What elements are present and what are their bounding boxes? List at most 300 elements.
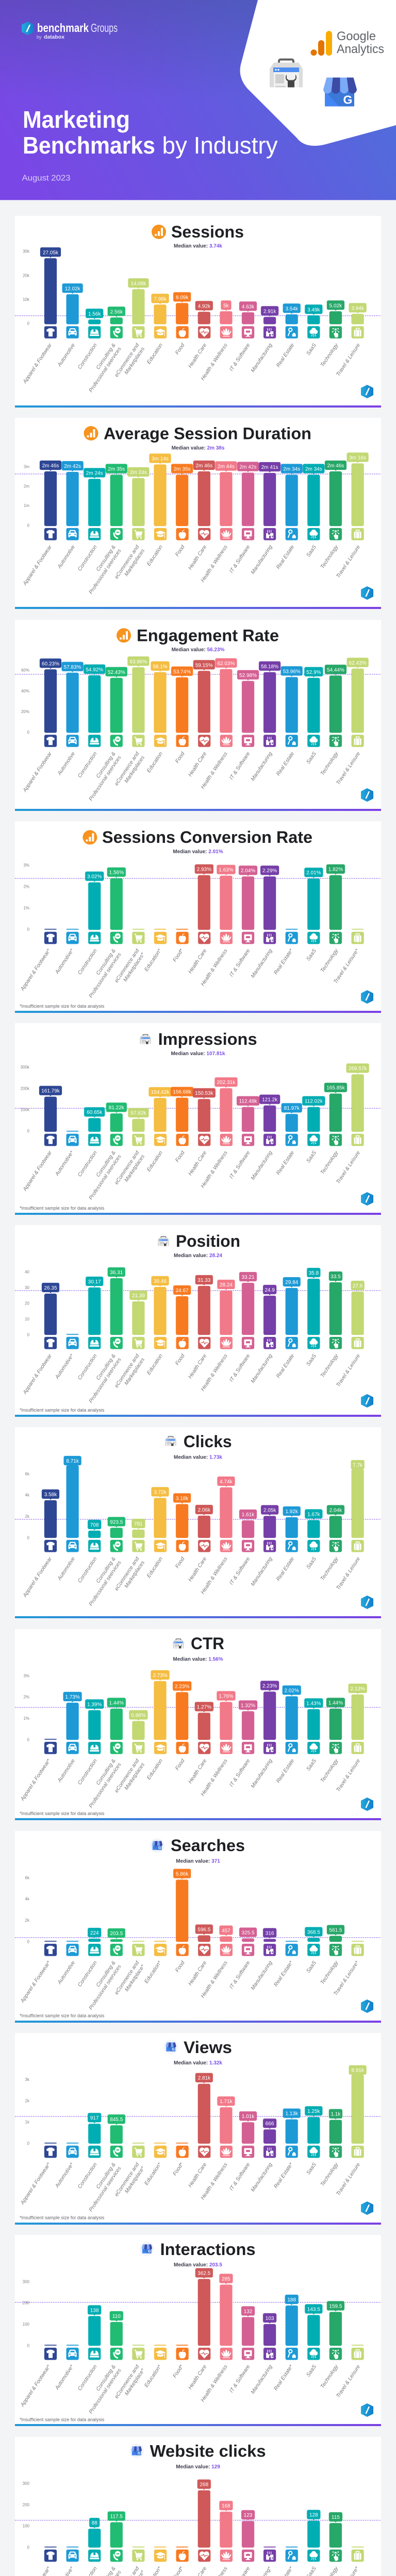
bar: Construction: 3.02% xyxy=(87,874,102,880)
industry labels: Manufacturing xyxy=(250,2162,274,2193)
bar: Food: 24.67 xyxy=(176,1288,189,1294)
bar: Automotive: 1.73% xyxy=(65,1694,80,1700)
y axis: 0 xyxy=(27,927,30,931)
bar: SaaS xyxy=(302,1096,325,1132)
bar: Health Care: 2.06k xyxy=(198,1507,211,1513)
median line xyxy=(15,1519,381,1520)
bar: Manufacturing xyxy=(263,2313,276,2346)
bar: IT & Software xyxy=(239,1928,257,1942)
industry labels: Marketplace* xyxy=(124,1963,146,1993)
heading: CTR xyxy=(191,1634,224,1653)
industry labels: SaaS xyxy=(306,2162,318,2176)
industry labels: Professional seervices xyxy=(88,2368,123,2415)
industry labels: Consulting & xyxy=(95,2364,117,2392)
panel: Clicks xyxy=(15,1427,381,1618)
bar: IT & Software xyxy=(237,1096,259,1132)
bar: Apparel: 2m 46s xyxy=(42,463,59,469)
industry labels: Consulting & xyxy=(95,1556,117,1584)
median value: Median value: 1.56% xyxy=(173,1657,223,1663)
bar: Consulting: 203.5 xyxy=(110,1931,123,1937)
bar: Automotive xyxy=(62,461,84,526)
bar: Travel & Leisure: 62.43% xyxy=(349,660,367,666)
bar: Consulting: 52.43% xyxy=(108,670,125,675)
y axis: 0 xyxy=(27,1129,30,1133)
brand mark xyxy=(361,1193,373,1205)
bar: Health & Wellness: 202.31k xyxy=(217,1080,236,1086)
bar: IT & Software xyxy=(239,301,257,324)
bar: Food: 8.09k xyxy=(176,295,189,300)
median line xyxy=(15,473,381,474)
bar: IT & Software: 1.32% xyxy=(241,1703,255,1708)
heading: Engagement Rate xyxy=(137,626,279,645)
industry labels: Technology xyxy=(320,544,340,570)
industry labels: Consulting & xyxy=(95,948,117,976)
y axis xyxy=(23,249,30,326)
bar: Apparel: 161.79k xyxy=(41,1089,60,1094)
bar: Health Care xyxy=(195,1275,213,1335)
logo: benchmark Groups by databox: databox xyxy=(44,35,64,40)
industry labels: Real Estate xyxy=(275,1150,295,1176)
industry labels: Manufacturing xyxy=(250,751,274,782)
industry labels: eCommerce and xyxy=(114,948,141,984)
bar: Health & Wellness: 4.74k xyxy=(220,1479,233,1485)
industry labels: Technology xyxy=(320,342,340,368)
industry labels: Health & Wellness xyxy=(200,1960,229,1999)
industry labels xyxy=(20,2364,361,2415)
industry labels: Real Estate xyxy=(275,343,295,368)
y axis: 3k xyxy=(25,2077,30,2082)
industry labels: Education* xyxy=(144,2364,163,2388)
y axis: 2k xyxy=(25,1514,30,1519)
bar: Health & Wellness: 28.24 xyxy=(220,1282,233,1288)
icon: Search Console xyxy=(158,1236,169,1246)
bar: SaaS xyxy=(307,2510,320,2548)
industry labels: Consulting & xyxy=(95,1353,117,1381)
bar: IT & Software: 132 xyxy=(244,2309,253,2314)
industry labels: Professional seervices xyxy=(88,952,123,999)
bar: Health & Wellness xyxy=(217,1477,235,1538)
bar: IT & Software xyxy=(239,1700,257,1740)
y axis: 100 xyxy=(23,2524,30,2529)
chart: Sessions xyxy=(22,247,367,394)
brand mark xyxy=(361,2000,373,2012)
bar: Health Care: 59.15% xyxy=(195,663,213,668)
bar: Apparel xyxy=(39,1086,62,1132)
bar: Travel & Leisure: 2.13% xyxy=(350,1686,365,1692)
bar: Health Care xyxy=(193,461,215,526)
median value: Median value: 28.24 xyxy=(174,1253,222,1259)
icon: Search Console xyxy=(173,1639,184,1649)
bar: Real Estate xyxy=(283,1686,301,1740)
bar: Apparel (no data) xyxy=(44,1941,57,1942)
industry labels: Food xyxy=(174,1758,186,1771)
industry labels: Professional seervices xyxy=(88,346,123,394)
bar: Food xyxy=(173,1869,191,1942)
industry labels: Food xyxy=(174,1556,186,1569)
bar: Real Estate (no data) xyxy=(286,2547,298,2548)
bar: Health & Wellness: 5k xyxy=(223,303,229,309)
brand mark xyxy=(361,991,373,1003)
industry labels: eCommerce and xyxy=(114,1960,141,1996)
bar: Apparel (no data) xyxy=(44,2345,57,2346)
footnote: *Insufficient sample size for data analysis xyxy=(20,1811,105,1816)
y axis: 2k xyxy=(25,2098,30,2103)
icon: Google Business xyxy=(140,2242,154,2256)
bar: IT & Software xyxy=(241,2306,255,2346)
bar: Manufacturing (no data) xyxy=(263,2547,276,2548)
bar: Manufacturing xyxy=(263,1285,276,1335)
y axis: 300 xyxy=(23,2279,30,2284)
industry labels: Education xyxy=(146,544,164,567)
bar: Technology xyxy=(325,461,346,526)
y axis: 300k xyxy=(21,1065,30,1070)
median line xyxy=(15,1108,381,1109)
y axis: 2m xyxy=(24,484,29,488)
bar: Health & Wellness xyxy=(214,1077,237,1132)
industry labels: Consulting & xyxy=(95,751,117,779)
bar: Construction xyxy=(85,1699,104,1740)
industry labels: Professional seervices xyxy=(88,1762,123,1809)
industry labels: Consulting & xyxy=(95,2162,117,2190)
bar: Manufacturing: 2.91k xyxy=(263,309,276,314)
bar: Food xyxy=(173,1285,191,1335)
bar: Health Care: 31.33 xyxy=(197,1278,211,1283)
industry labels: Health & Wellness xyxy=(200,2364,229,2403)
heading: Sessions xyxy=(171,223,244,241)
bar: Construction: 224 xyxy=(90,1930,99,1936)
industry labels: Construction xyxy=(77,948,98,976)
bar: eCommerce xyxy=(127,656,149,733)
bar: Travel & Leisure: 3m 16s xyxy=(349,455,366,461)
title xyxy=(23,106,277,159)
chart: Sessions Conversion Rate xyxy=(20,863,364,999)
bar: Health & Wellness: 1.71k xyxy=(220,2099,233,2105)
logo: Google Analytics: Analytics xyxy=(337,42,384,56)
bar: Construction xyxy=(86,1277,103,1335)
industry labels: IT & Software xyxy=(228,2364,252,2394)
bar: Health & Wellness: 168 xyxy=(222,2503,230,2509)
bar: Consulting: 36.31 xyxy=(110,1270,123,1276)
bar: IT & Software: 123 xyxy=(244,2513,253,2518)
industry labels: Marketplaces xyxy=(124,346,146,376)
industry labels: Manufacturing xyxy=(250,2364,274,2395)
industry labels: eCommerce and xyxy=(114,1150,141,1185)
y axis xyxy=(23,2279,30,2348)
bar: Travel & Leisure: 8.91k xyxy=(351,2068,365,2074)
heading: Clicks xyxy=(184,1432,232,1451)
y axis xyxy=(23,2481,30,2550)
bar: Manufacturing xyxy=(259,1095,280,1132)
y axis: 40 xyxy=(25,1269,30,1275)
industry labels: Technology xyxy=(320,1150,340,1176)
bar: Real Estate: 53.96% xyxy=(283,669,301,674)
industry labels: Travel & Leisure xyxy=(335,2364,361,2399)
y axis xyxy=(25,1269,30,1337)
chart: Searches xyxy=(20,1869,364,2011)
y axis: 0 xyxy=(27,1939,30,1944)
bar: Food (no data) xyxy=(176,2345,188,2346)
median value: Median value: 203.5 xyxy=(174,2262,222,2268)
bar: Education xyxy=(152,294,169,324)
industry labels: Automotive* xyxy=(54,1149,75,1177)
industry icons xyxy=(44,735,364,747)
industry labels xyxy=(20,947,360,999)
bar: Education: 154.42k xyxy=(151,1090,170,1095)
industry labels: Marketplaces* xyxy=(123,952,146,983)
y axis: 6k xyxy=(25,1875,30,1880)
heading: Position xyxy=(176,1232,240,1250)
industry labels: Manufacturing xyxy=(250,343,274,374)
industry labels: SaaS xyxy=(306,948,318,962)
bar: Consulting xyxy=(106,464,127,526)
bar: eCommerce (no data) xyxy=(132,2345,144,2346)
bar: Technology: 2.04k xyxy=(329,1507,342,1514)
industry labels: Automotive* xyxy=(54,1353,75,1381)
y axis: 1m xyxy=(24,503,29,508)
title: Marketing xyxy=(23,106,130,133)
median line xyxy=(15,878,381,879)
industry labels: Manufacturing xyxy=(250,1556,274,1587)
industry labels: Apparel & Footwear xyxy=(22,1353,53,1396)
industry labels: Health & Wellness xyxy=(200,1758,229,1797)
bar: Automotive xyxy=(62,283,83,324)
y axis: 4k xyxy=(25,1897,30,1902)
bar: SaaS xyxy=(303,464,324,526)
industry labels: Health Care xyxy=(187,1556,208,1583)
brand mark xyxy=(361,2202,373,2214)
y axis: 60% xyxy=(21,668,29,673)
bar: SaaS xyxy=(307,1268,320,1335)
bar: Automotive xyxy=(62,662,84,733)
bar: Technology: 1.44% xyxy=(328,1700,343,1706)
bar: Travel & Leisure: 7.7k xyxy=(353,1463,363,1468)
industry labels: Health & Wellness xyxy=(200,948,229,987)
bar: Education: 3m 14s xyxy=(152,456,169,462)
bar: Consulting xyxy=(107,1698,126,1740)
industry labels: Automotive xyxy=(57,1758,76,1784)
bar: Education (no data) xyxy=(154,929,166,930)
bar: Manufacturing: 2m 41s xyxy=(261,465,278,470)
bar: Automotive xyxy=(64,1456,81,1538)
industry labels xyxy=(22,342,361,394)
industry labels: SaaS xyxy=(306,544,318,558)
industry labels: Professional seervices xyxy=(88,1964,123,2011)
y axis: 1% xyxy=(23,1716,29,1721)
bar: Real Estate xyxy=(285,2295,299,2346)
bar: SaaS: 1.67k xyxy=(307,1512,321,1518)
industry icons xyxy=(44,1742,364,1754)
bar: Health Care: 268 xyxy=(200,2482,209,2488)
bar: Education: 30.46 xyxy=(154,1279,167,1284)
industry icons xyxy=(44,528,364,540)
industry labels: Automotive* xyxy=(54,2364,75,2392)
bar: IT & Software: 1.01k xyxy=(242,2114,255,2120)
industry labels: IT & Software xyxy=(228,1353,252,1383)
bar: SaaS xyxy=(305,2106,322,2144)
logo: benchmark Groups by databox: Groups xyxy=(91,21,118,35)
bar: eCommerce: 2m 24s xyxy=(130,470,147,476)
bar: eCommerce (no data) xyxy=(132,1941,144,1942)
bar: Manufacturing xyxy=(263,2119,276,2144)
industry labels: Automotive xyxy=(57,751,76,777)
bar: Construction: 54.92% xyxy=(86,667,103,673)
industry labels: Health & Wellness xyxy=(200,1353,229,1392)
bar: Manufacturing: 316 xyxy=(266,1931,274,1936)
industry labels: Education* xyxy=(144,2161,163,2187)
median line xyxy=(15,1937,381,1938)
heading: Interactions xyxy=(160,2240,256,2259)
bar: Health Care: 4.92k xyxy=(198,303,211,309)
industry labels: Manufacturing xyxy=(250,1150,274,1181)
heading: Sessions Conversion Rate xyxy=(102,828,312,846)
bar: Construction xyxy=(88,1928,101,1942)
bar: Education (no data) xyxy=(154,2547,166,2548)
bar: Technology: 159.5 xyxy=(329,2304,342,2309)
bar: Technology xyxy=(327,300,344,324)
industry labels: Consulting & xyxy=(95,343,117,370)
industry labels: IT & Software xyxy=(228,544,252,574)
bar: Apparel: 26.35 xyxy=(44,1285,57,1291)
title: Benchmarks xyxy=(23,132,155,159)
bar: Technology xyxy=(327,1505,344,1538)
industry labels: Construction xyxy=(77,343,98,370)
bar: Consulting: 110 xyxy=(112,2314,121,2319)
y axis: 100k xyxy=(21,1108,30,1112)
bar: IT & Software xyxy=(237,462,259,526)
industry labels: Real Estate xyxy=(275,1353,295,1379)
bar: Health & Wellness xyxy=(220,300,232,324)
y axis: 0 xyxy=(27,730,30,735)
bar: SaaS xyxy=(305,1510,322,1538)
bar: eCommerce: 781 xyxy=(134,1521,143,1527)
median line xyxy=(15,1290,381,1291)
bar: Apparel (no data) xyxy=(44,2547,57,2548)
chart: Website clicks xyxy=(20,2480,364,2576)
bar: Automotive (no data) xyxy=(67,2547,79,2548)
bar: Travel & Leisure xyxy=(351,1281,365,1335)
bar: Travel & Leisure xyxy=(351,1460,365,1538)
industry labels: Health Care xyxy=(187,1150,208,1177)
industry labels: IT & Software xyxy=(228,948,252,978)
industry labels: IT & Software xyxy=(228,1150,252,1180)
bar: Real Estate: 188 xyxy=(287,2297,296,2303)
industry labels: Construction xyxy=(77,2162,98,2190)
bar: IT & Software: 112.48k xyxy=(239,1099,257,1105)
panel: Website clicks xyxy=(15,2437,381,2576)
industry labels: IT & Software xyxy=(228,2162,252,2192)
bar: Construction xyxy=(88,2305,101,2346)
panel: Engagement Rate xyxy=(15,620,381,811)
panel: Searches xyxy=(15,1831,381,2023)
bar: Food: 2m 35s xyxy=(174,467,190,472)
y axis: 200 xyxy=(23,2301,30,2306)
industry icons xyxy=(44,1540,364,1552)
bar: IT & Software xyxy=(239,1510,257,1538)
bar: Construction: 917 xyxy=(90,2115,99,2121)
industry labels: Apparel & Footwear xyxy=(22,544,53,587)
bar: Manufacturing: 2.29% xyxy=(262,868,277,874)
bar: Technology xyxy=(326,1698,345,1740)
bar: Health Care xyxy=(195,1505,213,1538)
bar: Real Estate xyxy=(283,303,301,324)
bar: Real Estate xyxy=(283,1277,301,1335)
bar: SaaS: 1.25k xyxy=(307,2109,321,2114)
y axis: 30 xyxy=(25,1285,30,1290)
brand mark xyxy=(361,1798,373,1810)
bar: Health & Wellness xyxy=(217,1691,235,1740)
bar: eCommerce xyxy=(127,467,149,526)
bar: Automotive (no data) xyxy=(67,2345,79,2346)
bar: Health Care xyxy=(197,2480,211,2548)
industry icons xyxy=(44,1337,364,1349)
industry labels: SaaS xyxy=(306,343,318,357)
bar: eCommerce xyxy=(129,1291,147,1335)
industry labels: Manufacturing xyxy=(250,948,274,979)
bar: Manufacturing: 2.23% xyxy=(262,1684,277,1689)
bar: Apparel (no data) xyxy=(44,2143,57,2144)
bar: Health Care xyxy=(195,1702,213,1740)
industry labels: Health Care xyxy=(187,1960,208,1987)
industry labels: Health & Wellness xyxy=(200,1150,229,1189)
bar: Consulting: 1.56% xyxy=(109,870,124,876)
industry labels: Real Estate xyxy=(275,1758,295,1784)
industry labels: IT & Software xyxy=(228,751,252,781)
industry labels: Education* xyxy=(144,1960,163,1985)
median value: Median value: 2.01% xyxy=(173,849,223,855)
heading: Searches xyxy=(171,1836,245,1855)
bar: Real Estate: 1.13k xyxy=(285,2111,299,2117)
bar: Construction xyxy=(85,872,104,930)
median line xyxy=(15,1707,381,1708)
industry labels: SaaS xyxy=(306,1353,318,1367)
industry labels: eCommerce and xyxy=(114,2162,141,2197)
bar: Construction xyxy=(88,2518,101,2548)
y axis: 0 xyxy=(27,2343,30,2348)
icon: Google Business xyxy=(150,1838,164,1853)
chart: Clicks xyxy=(22,1456,365,1607)
bar: Education xyxy=(148,1087,171,1132)
bar: Automotive (no data) xyxy=(67,2143,79,2144)
icon: Google Business store xyxy=(323,77,357,106)
bar: Food xyxy=(173,1493,191,1538)
industry labels: Real Estate* xyxy=(273,2161,294,2190)
icon: Google Analytics xyxy=(152,225,166,239)
bar: Health & Wellness xyxy=(217,865,235,930)
industry labels: Real Estate* xyxy=(273,947,294,976)
industry labels: Health Care xyxy=(187,343,208,369)
bar: eCommerce (no data) xyxy=(132,2143,144,2144)
median value: Median value: 107.81k xyxy=(171,1051,225,1057)
brand mark xyxy=(361,2404,373,2416)
industry labels: Travel & Leisure xyxy=(335,751,361,786)
logo: Google Analytics xyxy=(310,29,384,56)
bar: Health Care: 2m 46s xyxy=(195,463,212,469)
industry icons xyxy=(44,2146,364,2158)
bar: Health & Wellness xyxy=(215,462,237,526)
bar: IT & Software: 52.98% xyxy=(239,673,257,679)
bar: Automotive (no data) xyxy=(67,1334,79,1335)
industry labels: Construction xyxy=(77,1150,98,1178)
icon: Google Business xyxy=(164,2040,178,2054)
y axis: 3m xyxy=(24,464,29,469)
bar: Real Estate: 81.97k xyxy=(284,1106,300,1111)
y axis: 3% xyxy=(23,1673,29,1678)
y axis: 0 xyxy=(27,321,30,326)
bar: Technology: 1.82% xyxy=(328,867,343,873)
logo: Google Analytics: Google xyxy=(337,29,376,43)
logo: benchmark Groups by databox: benchmark xyxy=(37,21,89,35)
logo: benchmark Groups by databox xyxy=(22,21,118,40)
